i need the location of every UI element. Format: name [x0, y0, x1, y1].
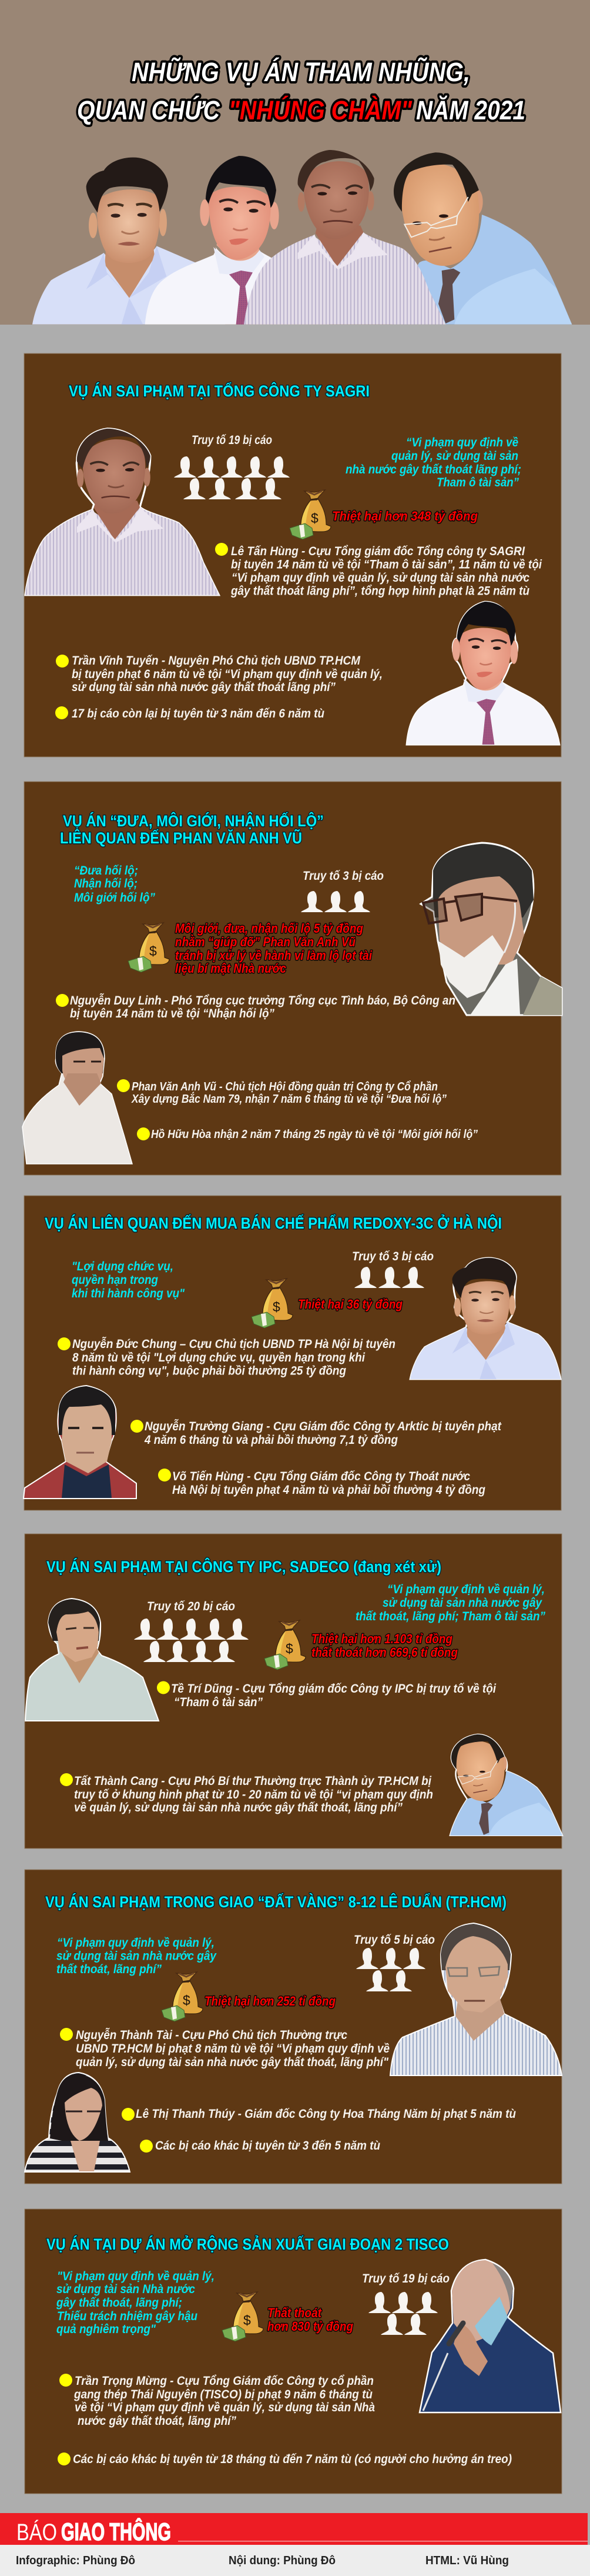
sentence: Võ Tiến Hùng: Võ Tiến Hùng - Cựu Tổng Giám đốc Công ty Thoát nước	[172, 1470, 470, 1483]
sentence: Phan Văn Anh Vũ	[117, 1079, 447, 1106]
defendants count	[352, 1250, 434, 1288]
defendants count: Truy tố 19 bị cáo	[192, 433, 272, 447]
header band	[0, 0, 590, 325]
sentence: Nguyễn Đức Chung: 8 năm tù về tội "Lợi dụng chức vụ, quyền hạn trong khi	[72, 1351, 366, 1364]
sentence: Nguyễn Trường Giang: Nguyễn Trường Giang - Cựu Giám đốc Công ty Arktic bị tuyên phạt	[145, 1420, 502, 1433]
charges quote: sử dụng tài sản nhà nước gây	[383, 1596, 542, 1610]
sentence: Trần Trọng Mừng: Trần Trọng Mừng - Cựu Tổng Giám đốc Công ty cổ phần	[75, 2374, 374, 2388]
sentence: Trần Vĩnh Tuyến: Trần Vĩnh Tuyến - Nguyên Phó Chủ tịch UBND TP.HCM	[72, 654, 360, 668]
defendants count	[174, 433, 290, 499]
portrait: Trần Trọng Mừng	[420, 2260, 561, 2413]
panel: TISCO case	[25, 2209, 562, 2494]
sentence: Lê Tấn Hùng: gây thất thoát lãng phí”, tổng hợp hình phạt là 25 năm tù	[230, 585, 529, 598]
sentence: Nguyễn Thành Tài: UBND TP.HCM bị phạt 8 năm tù về tội “Vi phạm quy định về	[76, 2042, 390, 2056]
charges quote: khi thi hành công vụ"	[72, 1287, 185, 1300]
charges quote: Tham ô tài sản”	[437, 476, 519, 489]
charges quote	[56, 2270, 214, 2336]
sentence: Tất Thành Cang: truy tố ở khung hình phạt từ 10 - 20 năm tù về tội “vi phạm quy định	[74, 1788, 433, 1801]
logo: GIAO THÔNG	[61, 2517, 171, 2545]
heading: VỤ ÁN SAI PHẠM TẠI TỔNG CÔNG TY SAGRI	[69, 382, 370, 400]
sentence: Võ Tiến Hùng: Hà Nội bị tuyên phạt 4 năm tù và phải bồi thường 4 tỷ đồng	[172, 1483, 485, 1497]
sentence: Tất Thành Cang: Tất Thành Cang - Cựu Phó Bí thư Thường trực Thành ủy TP.HCM bị	[74, 1774, 432, 1788]
sentence: Nguyễn Duy Linh	[56, 994, 455, 1020]
charges quote: Nhận hối lộ;	[74, 877, 138, 890]
sentence: Lê Tấn Hùng: “Vi phạm quy định về quản lý, sử dụng tài sản nhà nước	[232, 571, 529, 585]
charges quote	[356, 1583, 545, 1623]
charges quote: “Vi phạm quy định về quản lý,	[57, 1936, 214, 1950]
sentence: Nguyễn Đức Chung: thi hành công vụ", buộc phải bồi thường 25 tỷ đồng	[72, 1364, 346, 1377]
damage amount: Thiệt hại 36 tỷ đồng	[298, 1297, 403, 1312]
sentence: Nguyễn Thành Tài: quản lý, sử dụng tài sản nhà nước gây thất thoát, lãng phí"	[76, 2056, 389, 2069]
damage amount: Thiệt hại hơn 1.103 tỉ đồng	[311, 1631, 452, 1646]
sentence: Lê Tấn Hùng: bị tuyên 14 năm tù về tội “Tham ô tài sản”, 11 năm tù về tội	[231, 558, 542, 572]
defendants count	[134, 1600, 249, 1662]
sentence: Tề Trí Dũng	[157, 1681, 497, 1709]
title: QUAN CHỨC	[77, 95, 220, 125]
heading: LIÊN QUAN ĐẾN PHAN VĂN ANH VŨ	[60, 829, 302, 847]
charges quote: thất thoát, lãng phí”	[56, 1963, 162, 1976]
sentence: Nguyễn Trường Giang: 4 năm 6 tháng tù và phải bồi thường 7,1 tỷ đồng	[144, 1433, 398, 1447]
header portraits	[32, 150, 572, 325]
defendants count	[362, 2272, 450, 2335]
footer credits: Nội dung: Phùng Đô	[229, 2554, 336, 2567]
charges quote	[72, 1260, 185, 1300]
sentence: Trần Vĩnh Tuyến: sử dụng tài sản nhà nước gây thất thoát lãng phí”	[72, 680, 336, 694]
sentence: Nguyễn Trường Giang	[130, 1420, 502, 1447]
damage amount: hơn 830 tỷ đồng	[267, 2319, 353, 2334]
panel: SAGRI case	[24, 353, 561, 757]
charges quote: Thiếu trách nhiệm gây hậu	[57, 2310, 197, 2323]
sentence: Trần Vĩnh Tuyến: bị tuyên phạt 6 năm tù về tội “Vi phạm quy định về quản lý,	[72, 668, 383, 681]
damage amount: Thiệt hại hơn 348 tỷ đồng	[332, 509, 478, 523]
panel: Redoxy-3C case	[24, 1196, 561, 1510]
sentence: Lê Tấn Hùng	[215, 543, 542, 598]
sentence: Nguyễn Đức Chung: Nguyễn Đức Chung – Cựu Chủ tịch UBND TP Hà Nội bị tuyên	[72, 1337, 395, 1351]
sentence: Võ Tiến Hùng	[158, 1469, 485, 1497]
sentence: Trần Trọng Mừng: về tội “Vi phạm quy định về quản lý, sử dụng tài sản Nhà	[75, 2401, 375, 2414]
charges quote	[74, 864, 155, 905]
footer credits: Infographic: Phùng Đô	[16, 2554, 135, 2567]
portrait: Lê Tấn Hùng	[25, 429, 219, 595]
sentence: Trần Trọng Mừng: nước gây thất thoát, lãng phí”	[78, 2414, 236, 2428]
damage amount: thất thoát hơn 669,6 tỉ đồng	[311, 1645, 458, 1660]
sentence: Lê Thị Thanh Thúy: Lê Thị Thanh Thúy - Giám đốc Công ty Hoa Tháng Năm bị phạt 5 năm tù	[136, 2107, 516, 2121]
heading: VỤ ÁN SAI PHẠM TẠI CÔNG TY IPC, SADECO (đang xét xử)	[46, 1557, 441, 1576]
icon: money bag	[264, 1620, 306, 1670]
damage amount	[267, 2305, 353, 2334]
portrait: Trần Vĩnh Tuyến	[407, 602, 559, 745]
portrait: Lê Thị Thanh Thúy	[25, 2073, 130, 2172]
charges quote: “Đưa hối lộ;	[74, 864, 138, 877]
sentence: Nguyễn Đức Chung	[58, 1337, 395, 1377]
icon: money bag	[290, 490, 331, 539]
sentence: Nguyễn Thành Tài	[60, 2028, 390, 2069]
portrait: Nguyễn Đức Chung	[410, 1258, 561, 1379]
panel: bribery case	[22, 782, 562, 1175]
damage amount	[311, 1631, 458, 1660]
sentence: Tất Thành Cang: về quản lý, sử dụng tài sản nhà nước gây thất thoát, lãng phí”	[74, 1801, 403, 1814]
defendants count: Truy tố 19 bị cáo	[362, 2272, 450, 2285]
charges quote: sử dụng tài sản nhà nước gây	[56, 1949, 217, 1963]
sentence: Tề Trí Dũng: Tề Trí Dũng - Cựu Tổng giám đốc Công ty IPC bị truy tố về tội	[171, 1682, 497, 1696]
icon: money bag	[252, 1279, 293, 1328]
footer logo band	[0, 2513, 588, 2545]
portrait: Nguyễn Thành Tài	[390, 1923, 562, 2076]
charges quote: sử dụng tài sản Nhà nước	[56, 2283, 195, 2296]
heading: VỤ ÁN SAI PHẠM TRONG GIAO “ĐẤT VÀNG” 8-12 LÊ DUẨN (TP.HCM)	[45, 1893, 507, 1911]
charges quote: nhà nước gây thất thoát lãng phí;	[346, 463, 521, 476]
heading: VỤ ÁN “ĐƯA, MÔI GIỚI, NHẬN HỐI LỘ”	[63, 811, 324, 830]
damage description	[175, 921, 373, 976]
portrait: Phan Văn Anh Vũ	[22, 1032, 132, 1164]
sentence: Hồ Hữu Hòa: Hồ Hữu Hòa nhận 2 năm 7 tháng 25 ngày tù về tội “Môi giới hối lộ”	[151, 1128, 478, 1141]
charges quote: quản lý, sử dụng tài sản	[391, 449, 518, 463]
sentence: Nguyễn Thành Tài: Nguyễn Thành Tài - Cựu Phó Chủ tịch Thường trực	[76, 2028, 347, 2042]
sentence: Nguyễn Duy Linh: bị tuyên 14 năm tù về tội “Nhận hối lộ”	[70, 1007, 274, 1020]
charges quote: quyền hạn trong	[72, 1273, 158, 1287]
sentence: Tề Trí Dũng: “Tham ô tài sản”	[174, 1696, 263, 1709]
panel: 8-12 Lê Duẩn case	[25, 1870, 562, 2184]
sentence: Tất Thành Cang	[60, 1773, 433, 1814]
damage amount: Thiệt hại hơn 252 tỉ đồng	[205, 1994, 336, 2008]
defendants count: Truy tố 20 bị cáo	[147, 1600, 235, 1613]
icon: money bag	[128, 923, 169, 972]
defendants count: Truy tố 5 bị cáo	[354, 1933, 435, 1947]
damage amount: Thất thoát	[267, 2305, 322, 2320]
charges quote: gây thất thoát, lãng phí;	[56, 2296, 182, 2310]
panel: IPC, Sadeco case	[25, 1534, 562, 1848]
charges quote: “Vi phạm quy định về	[406, 436, 518, 449]
title: NĂM 2021	[416, 95, 525, 125]
defendants count: Truy tố 3 bị cáo	[352, 1250, 434, 1263]
charges quote: "Vi phạm quy định về quản lý,	[57, 2270, 214, 2283]
portrait: Tề Trí Dũng	[25, 1599, 159, 1721]
sentence: Trần Vĩnh Tuyến	[56, 654, 383, 694]
damage description: Môi giới, đưa, nhận hối lộ 5 tỷ đồng	[175, 921, 363, 936]
logo: BÁO	[16, 2519, 57, 2545]
defendants count: Truy tố 3 bị cáo	[303, 869, 384, 883]
charges quote: "Lợi dụng chức vụ,	[72, 1260, 173, 1273]
footer credits: HTML: Vũ Hùng	[425, 2554, 509, 2567]
charges quote	[56, 1936, 217, 1976]
title: "NHÚNG CHÀM"	[229, 95, 413, 125]
title	[77, 57, 525, 125]
defendants count	[301, 869, 384, 912]
charges quote: thất thoát, lãng phí; Tham ô tài sản”	[356, 1610, 545, 1623]
charges quote: Môi giới hối lộ”	[74, 891, 155, 905]
logo	[16, 2517, 171, 2545]
sentence: Trần Trọng Mừng	[59, 2374, 375, 2428]
heading	[60, 811, 324, 847]
sentence: Trần Trọng Mừng: gang thép Thái Nguyên (TISCO) bị phạt 9 năm 6 tháng tù	[73, 2388, 373, 2401]
heading: VỤ ÁN TẠI DỰ ÁN MỞ RỘNG SẢN XUẤT GIAI ĐOẠN 2 TISCO	[46, 2234, 449, 2253]
sentence: Phan Văn Anh Vũ: Phan Văn Anh Vũ - Chủ tịch Hội đồng quản trị Công ty Cổ phần	[132, 1080, 438, 1093]
damage description: nhằm “giúp đỡ” Phan Văn Anh Vũ	[175, 935, 356, 949]
sentence: others: 17 bị cáo còn lại bị tuyên từ 3 năm đến 6 năm tù	[72, 707, 324, 720]
title: NHỮNG VỤ ÁN THAM NHŨNG,	[132, 57, 470, 87]
sentence: others: Các bị cáo khác bị tuyên từ 18 tháng tù đến 7 năm tù (có người cho hưởng án treo)	[73, 2452, 512, 2466]
heading: VỤ ÁN LIÊN QUAN ĐẾN MUA BÁN CHẾ PHẨM REDOXY-3C Ở HÀ NỘI	[45, 1213, 502, 1232]
icon: money bag	[162, 1972, 203, 2021]
sentence: Phan Văn Anh Vũ: Xây dựng Bắc Nam 79, nhận 7 năm 6 tháng tù về tội “Đưa hối lộ”	[131, 1092, 447, 1106]
portrait: Nguyễn Duy Linh	[421, 843, 562, 1015]
damage description: tránh bị xử lý về hành vi làm lộ lọt tài	[175, 948, 373, 963]
icon: money bag	[222, 2292, 263, 2341]
sentence: Nguyễn Duy Linh: Nguyễn Duy Linh - Phó Tổng cục trưởng Tổng cục Tình báo, Bộ Công an	[70, 994, 455, 1007]
footer credits	[0, 2545, 590, 2576]
portrait: Tất Thành Cang	[450, 1734, 562, 1836]
sentence: others: Các bị cáo khác bị tuyên từ 3 đến 5 năm tù	[155, 2139, 380, 2153]
defendants count	[354, 1933, 435, 1991]
sentence: Lê Tấn Hùng: Lê Tấn Hùng - Cựu Tổng giám đốc Tổng công ty SAGRI	[231, 545, 525, 558]
charges quote	[346, 436, 521, 489]
portrait: Nguyễn Trường Giang	[24, 1386, 136, 1499]
charges quote: quả nghiêm trọng"	[56, 2323, 156, 2336]
damage description: liệu bí mật Nhà nước	[175, 961, 286, 976]
charges quote: “Vi phạm quy định về quản lý,	[387, 1583, 545, 1596]
